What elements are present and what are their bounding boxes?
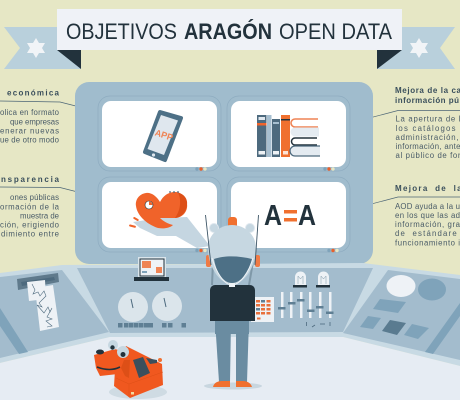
ribbon: left [4, 27, 81, 69]
right console controls [360, 275, 446, 339]
icon: phone with app: APP [154, 128, 174, 143]
dials [118, 291, 186, 328]
text block: left bottom [0, 175, 123, 238]
text block: right bottom: información, gra [395, 220, 460, 229]
monitor [134, 257, 169, 281]
character: person with robot head seen from behind [204, 215, 262, 390]
character: orange robot dog [94, 340, 167, 399]
text block: right bottom: de estándare [395, 229, 458, 238]
text block: left top: económica [7, 88, 60, 98]
text block: left bottom: ones públicas [10, 193, 59, 202]
icon: phone with app [145, 112, 181, 160]
text block: left top: que empresas [10, 118, 59, 126]
text block: left top: ue de otro modo [0, 136, 60, 144]
text block: right top: los catálogos [396, 124, 456, 133]
text block: right top: al público de for [396, 151, 460, 160]
text block: left top [0, 88, 123, 144]
panel: screens wall [75, 82, 373, 264]
text block: right top: La apertura de l [396, 114, 460, 124]
text block: left bottom: dimiento entre [1, 230, 59, 238]
floor [0, 337, 460, 400]
text block: right top: administración, [396, 133, 458, 142]
text block: left top: enerar nuevas [0, 126, 59, 136]
text block: left bottom: ción, erigiendo [0, 220, 60, 230]
icon: hand holding heart [129, 191, 210, 248]
title: OPEN DATA [279, 19, 392, 44]
keypad card [251, 297, 274, 322]
sliders and bulbs [278, 272, 334, 327]
text block: right bottom: funcionamiento i [395, 238, 460, 248]
text block: left bottom: nsparencia [1, 175, 60, 184]
text block: right top: información pú [395, 96, 459, 105]
text block: right top [335, 86, 460, 160]
icon: A=A: A [298, 200, 316, 232]
ribbon: right [377, 27, 455, 69]
text block: right top: Mejora de la ca [395, 86, 460, 95]
icon: A=A: A [264, 200, 282, 232]
text block: right bottom [335, 184, 460, 248]
text block: right bottom: en los que las ad [395, 211, 460, 220]
icon: books [257, 115, 320, 157]
text block: left bottom: ormación de la [0, 202, 60, 212]
title: ARAGÓN [184, 19, 272, 44]
text block: right bottom: AOD ayuda a la u [395, 202, 460, 211]
text block: right top: información, ante [396, 142, 460, 151]
icon: A=A [264, 200, 316, 232]
text block: left top: olica en formato [0, 108, 60, 117]
console body [0, 263, 460, 366]
printer with chart paper [17, 273, 59, 331]
text block: left bottom: muestra de [20, 212, 59, 220]
title: OBJETIVOS [66, 19, 177, 44]
title [57, 9, 402, 50]
